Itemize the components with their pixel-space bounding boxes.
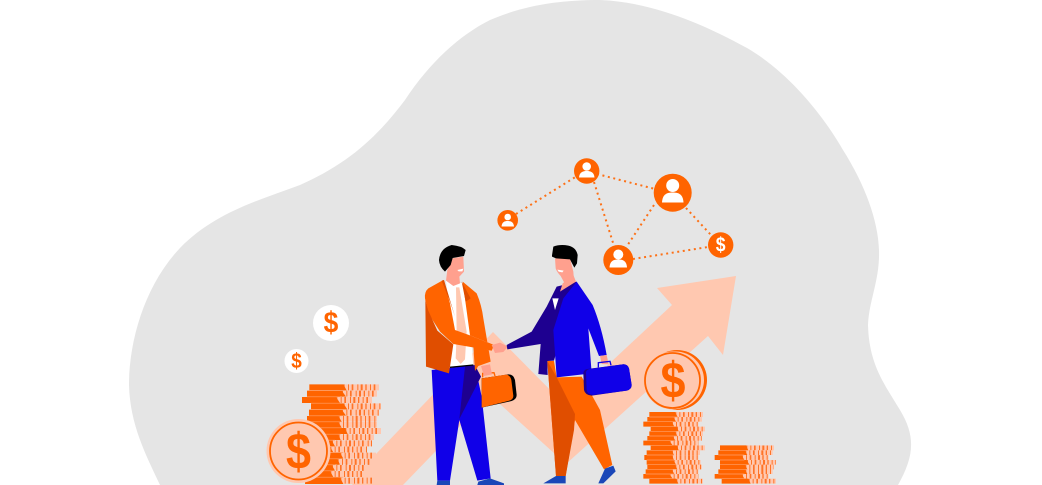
tie <box>456 287 467 364</box>
coin stack right <box>715 445 776 484</box>
network diagram <box>497 158 733 275</box>
background blob <box>129 0 911 485</box>
dollar node <box>708 232 733 258</box>
hair <box>439 245 466 272</box>
shirt <box>552 298 559 310</box>
jacket right panel <box>463 282 494 371</box>
briefcase <box>482 373 517 408</box>
floating coin large <box>313 305 349 341</box>
neck and head <box>446 257 464 286</box>
floating coin small <box>284 349 308 374</box>
head <box>555 258 574 284</box>
trousers <box>432 365 491 481</box>
shoes <box>437 478 504 485</box>
dollar coin left: $ <box>286 424 311 480</box>
person node: small left <box>497 210 518 231</box>
floating coin small: $ <box>291 350 302 374</box>
shirt <box>446 281 473 367</box>
hair <box>552 245 578 268</box>
shoes <box>543 466 616 483</box>
network connections <box>516 174 711 259</box>
coin stack left <box>302 384 381 484</box>
growth arrow <box>352 276 736 485</box>
trousers <box>547 361 612 476</box>
jacket front <box>553 282 607 377</box>
person node: top <box>574 158 599 184</box>
floating coin large: $ <box>324 305 339 339</box>
dollar coin left <box>266 419 330 483</box>
businessman right <box>507 245 632 483</box>
jacket back <box>507 282 577 375</box>
coin stack middle <box>643 412 705 484</box>
handshake <box>492 343 508 353</box>
businessman left <box>425 245 517 485</box>
neck <box>560 275 576 292</box>
jacket left panel and arm <box>425 280 494 351</box>
briefcase <box>583 361 632 396</box>
dollar node: $ <box>716 234 726 256</box>
lapels <box>442 280 471 317</box>
hand on case <box>481 364 492 376</box>
dollar coin right: $ <box>661 353 686 409</box>
jacket lower shade <box>425 300 453 373</box>
person node: lower <box>603 245 633 275</box>
dollar coin right <box>644 350 707 410</box>
person node: large <box>654 174 692 212</box>
hand on case <box>600 355 609 364</box>
